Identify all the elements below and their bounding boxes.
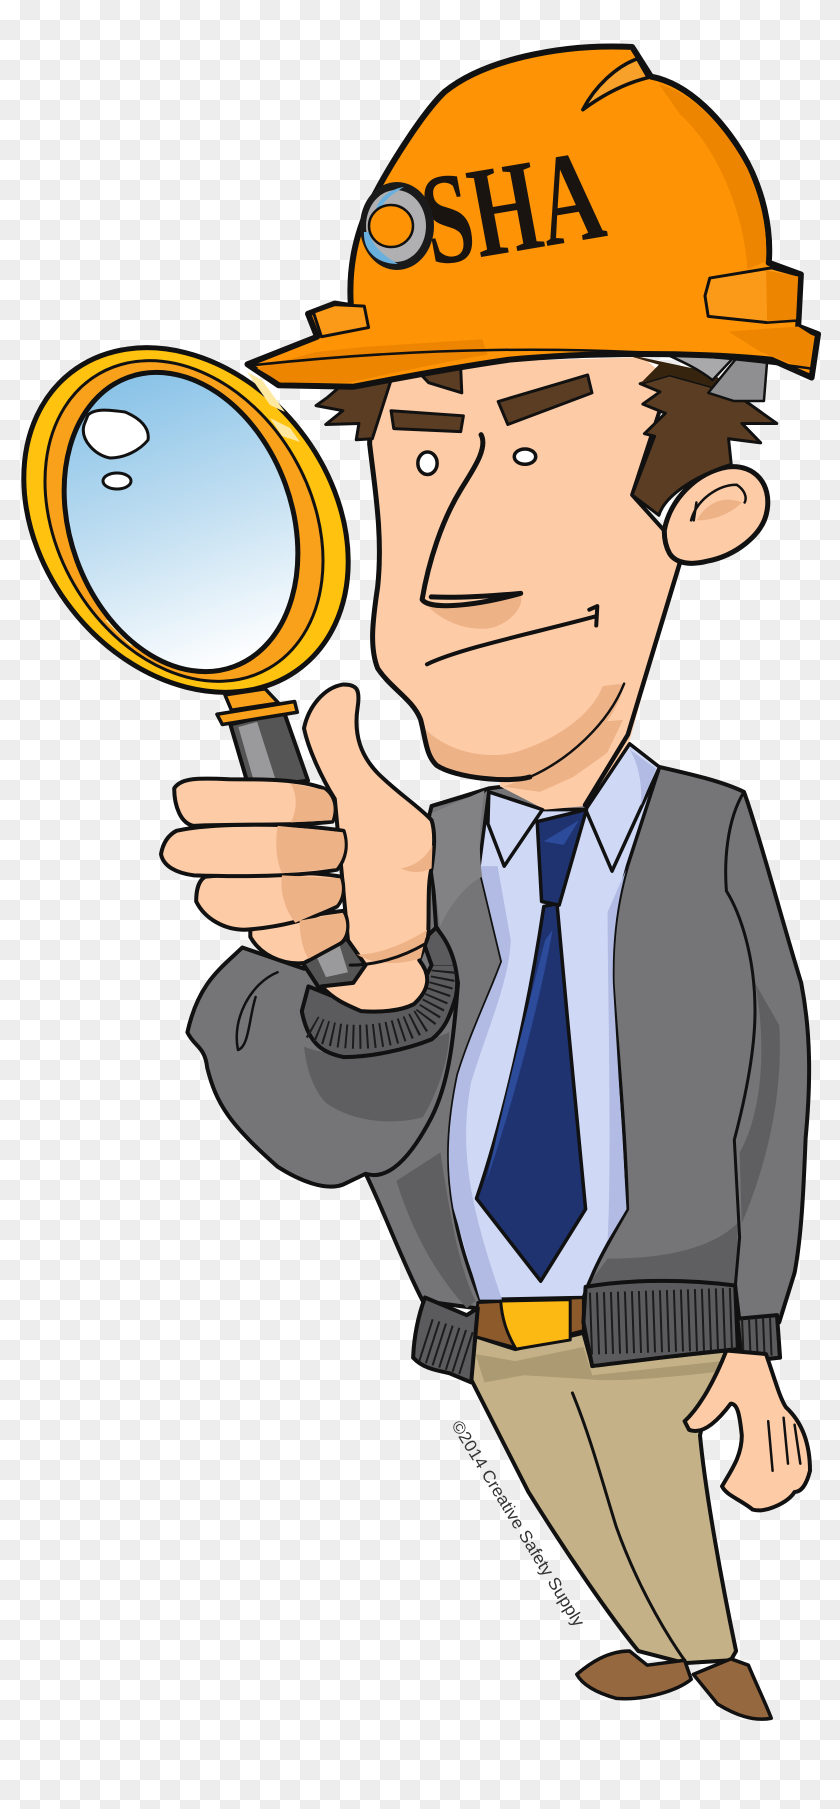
neck bbox=[500, 693, 643, 810]
helmet lettering: SHA bbox=[411, 121, 614, 293]
handle bbox=[230, 712, 308, 788]
hard hat liner bbox=[662, 352, 767, 401]
logo ring forming the O of OSHA bbox=[360, 182, 434, 270]
jacket waistband bbox=[413, 1281, 780, 1382]
belt and buckle bbox=[475, 1297, 583, 1349]
fingers bbox=[161, 779, 347, 963]
helmet shading bbox=[257, 84, 814, 383]
body: jacket, shirt, tie, trousers and shoes bbox=[187, 693, 810, 1719]
left hand gripping the handle bbox=[161, 684, 434, 1012]
sleeve cuff bbox=[302, 928, 457, 1057]
ear bbox=[664, 467, 768, 563]
lens glints bbox=[83, 410, 148, 489]
sleeve of raised arm bbox=[187, 791, 484, 1187]
necktie bbox=[476, 810, 586, 1281]
hair bbox=[316, 368, 777, 515]
frame outer ring bbox=[0, 283, 415, 757]
eyes bbox=[418, 449, 536, 474]
finger shading bbox=[276, 783, 346, 959]
shoes bbox=[577, 1651, 771, 1719]
frame inner ring bbox=[0, 310, 379, 732]
right hand bbox=[685, 1351, 810, 1510]
handle collar bbox=[217, 689, 297, 724]
palm and thumb bbox=[304, 684, 434, 1012]
helmet shell bbox=[247, 46, 818, 387]
head: face, ear, hair and features bbox=[316, 352, 777, 805]
trousers bbox=[469, 1333, 736, 1663]
mouth bbox=[427, 606, 597, 664]
brim line bbox=[252, 350, 810, 368]
frame highlights bbox=[105, 372, 300, 650]
helmet crest bbox=[583, 59, 648, 110]
shirt bbox=[449, 744, 660, 1300]
nose bbox=[422, 435, 521, 629]
jacket torso bbox=[366, 767, 809, 1322]
face bbox=[370, 357, 680, 805]
magnifying glass bbox=[0, 283, 415, 788]
copyright notice: ©2014 Creative Safety Supply bbox=[448, 1417, 588, 1630]
hard hat bbox=[247, 46, 818, 387]
eyebrows bbox=[391, 375, 592, 432]
helmet side bumps bbox=[313, 268, 799, 337]
lens bbox=[24, 339, 338, 705]
lower handle bbox=[302, 935, 366, 988]
collar bbox=[488, 744, 660, 871]
